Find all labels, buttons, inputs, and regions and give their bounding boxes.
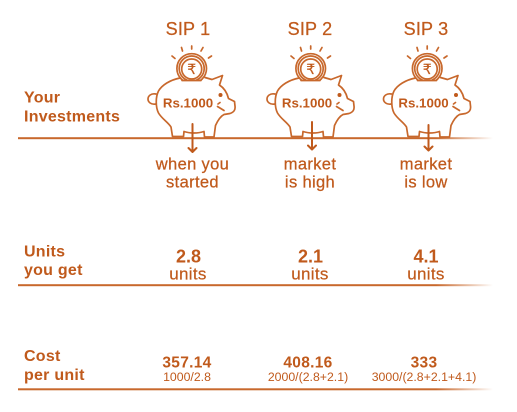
caption: market is low: is low xyxy=(404,174,448,192)
icon: piggy bank SIP 3 xyxy=(384,46,471,137)
value: 2.8 units: 2.8 xyxy=(176,246,201,266)
arrow: SIP 3 xyxy=(424,125,432,150)
value: 4.1 units: 4.1 xyxy=(413,246,439,266)
row label: Cost per unit: per unit xyxy=(24,367,85,384)
value: cost 333: 3000/(2.8+2.1+4.1) xyxy=(372,370,476,384)
caption: market is high xyxy=(284,155,336,192)
value: cost 357.14: 1000/2.8 xyxy=(163,370,211,384)
caption: market is low: market xyxy=(400,155,452,173)
column heading: SIP 1: SIP 1 xyxy=(166,19,210,39)
row label: Your Investments: Your xyxy=(24,90,60,106)
value: cost 408.16: 408.16 xyxy=(283,354,333,372)
icon: piggy bank SIP 2 xyxy=(267,46,354,137)
arrow: SIP 1 xyxy=(188,124,196,152)
value: cost 333: 333 xyxy=(411,354,437,372)
caption: market is low xyxy=(400,155,452,192)
row label: Units you get xyxy=(24,244,83,279)
value: 2.1 units: units xyxy=(291,264,329,284)
column heading: SIP 2: SIP 2 xyxy=(288,19,332,39)
rule: cost xyxy=(18,388,493,390)
value: cost 408.16: 2000/(2.8+2.1) xyxy=(268,370,348,384)
icon: piggy bank SIP 2: Rs.1000 xyxy=(282,96,332,110)
timeline rule: investments xyxy=(18,137,493,139)
value: 2.1 units xyxy=(291,246,329,284)
row label: Cost per unit xyxy=(24,348,85,384)
caption: when you started: started xyxy=(166,174,219,192)
caption: when you started xyxy=(155,155,229,192)
caption: when you started: when you xyxy=(155,155,229,173)
row label: Your Investments xyxy=(24,90,120,126)
icon: piggy bank SIP 1: Rs.1000 xyxy=(163,96,213,110)
rule: units xyxy=(18,284,493,286)
row label: Cost per unit: Cost xyxy=(24,348,61,365)
value: cost 357.14 xyxy=(162,354,212,384)
icon: piggy bank SIP 2: ₹ xyxy=(306,62,315,78)
icon: piggy bank SIP 3: ₹ xyxy=(423,62,432,78)
row label: Units you get: Units xyxy=(24,244,65,260)
value: cost 408.16 xyxy=(268,354,348,384)
caption: market is high: market xyxy=(284,155,336,173)
value: 2.8 units xyxy=(169,246,207,284)
value: cost 357.14: 357.14 xyxy=(162,354,212,372)
value: 4.1 units: units xyxy=(407,264,445,284)
arrow: SIP 2 xyxy=(308,122,316,150)
caption: market is high: is high xyxy=(285,174,335,192)
column heading: SIP 3: SIP 3 xyxy=(404,19,448,39)
icon: piggy bank SIP 1: ₹ xyxy=(187,62,196,78)
row label: Your Investments: Investments xyxy=(24,108,120,126)
value: 2.1 units: 2.1 xyxy=(298,246,323,266)
value: 4.1 units xyxy=(407,246,445,284)
icon: piggy bank SIP 3: Rs.1000 xyxy=(398,96,449,110)
row label: Units you get: you get xyxy=(24,262,83,279)
value: 2.8 units: units xyxy=(169,264,207,284)
icon: piggy bank SIP 1 xyxy=(148,46,235,137)
value: cost 333 xyxy=(372,354,476,384)
